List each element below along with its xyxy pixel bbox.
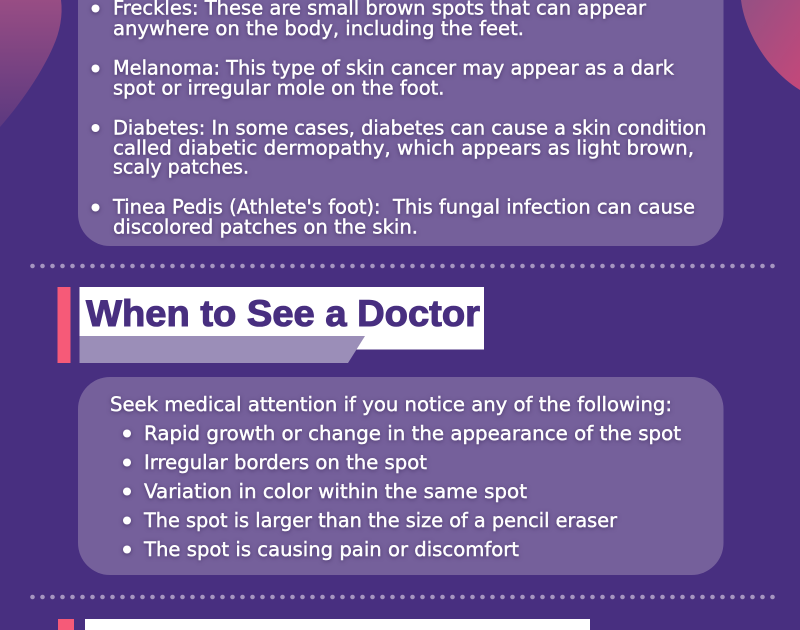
intro text: Seek medical attention if you notice any of the following: (110, 393, 672, 416)
bullet list: warning signs: Variation in color within the same spot (144, 480, 527, 503)
bullet list: warning signs: Rapid growth or change in the appearance of the spot (144, 422, 681, 445)
item: melanoma: spot or irregular mole on the foot. (113, 77, 444, 100)
panel: other causes of dark spots (78, 0, 724, 246)
item: diabetes: called diabetic dermopathy, which appears as light brown, (113, 137, 694, 160)
decorative blob: right (741, 0, 800, 90)
item: tinea pedis: Tinea Pedis (Athlete's foot): This fungal infection can cause (112, 196, 695, 219)
panel: when to seek medical attention (78, 377, 724, 575)
item: freckles: anywhere on the body, including the feet. (113, 17, 524, 40)
bullet list: causes (92, 0, 706, 239)
heading text: When to See a Doctor (86, 293, 480, 334)
item: diabetes (92, 117, 706, 179)
bullet list: warning signs: The spot is larger than the size of a pencil eraser (143, 509, 618, 532)
item: diabetes: Diabetes: In some cases, diabetes can cause a skin condition (113, 117, 706, 140)
item: melanoma (92, 57, 675, 100)
heading: when to see a doctor (58, 287, 484, 363)
item: tinea pedis: discolored patches on the skin. (113, 216, 418, 239)
bullet list: warning signs: Irregular borders on the spot (144, 451, 427, 474)
bullet list: warning signs: The spot is causing pain or discomfort (143, 538, 519, 561)
item: tinea pedis (92, 196, 695, 239)
decorative blob: left (0, 0, 62, 127)
bullet list: warning signs (123, 422, 681, 561)
item: diabetes: scaly patches. (113, 156, 249, 179)
item: melanoma: Melanoma: This type of skin cancer may appear as a dark (113, 57, 675, 80)
heading: next section, cropped at bottom edge (58, 619, 590, 630)
item: freckles (92, 0, 647, 40)
